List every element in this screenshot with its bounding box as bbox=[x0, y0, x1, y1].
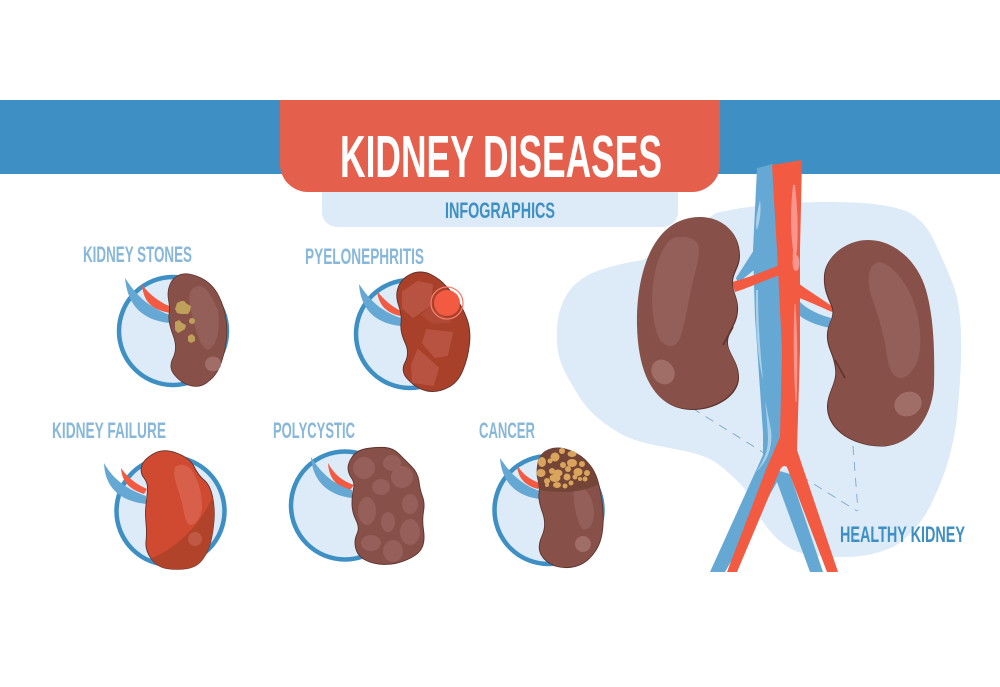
dashed leader lines bbox=[692, 408, 858, 511]
vessels bbox=[104, 463, 147, 504]
panel: kidney stones bbox=[83, 242, 227, 386]
right kidney bbox=[824, 240, 934, 446]
vessels bbox=[311, 457, 354, 498]
heading: PYELONEPHRITIS bbox=[305, 244, 424, 269]
kidney bbox=[168, 274, 227, 386]
background blob bbox=[557, 202, 961, 557]
circle bbox=[116, 457, 224, 565]
vessels bbox=[125, 278, 174, 323]
heading: CANCER bbox=[479, 418, 535, 443]
left kidney bbox=[637, 217, 740, 410]
subtitle: INFOGRAPHICS bbox=[445, 198, 555, 223]
circle bbox=[494, 456, 602, 564]
vein branch right bbox=[800, 302, 831, 328]
healthy kidney illustration bbox=[557, 160, 961, 572]
kidney bbox=[141, 451, 214, 569]
artery branch right bbox=[796, 283, 834, 312]
header band bbox=[0, 100, 1000, 174]
kidney bbox=[397, 272, 470, 392]
panel: pyelonephritis bbox=[305, 244, 470, 392]
vessels bbox=[359, 284, 403, 326]
circle bbox=[119, 277, 227, 385]
heading: KIDNEY STONES bbox=[83, 242, 192, 267]
kidney bbox=[537, 448, 603, 568]
heading: POLYCYSTIC bbox=[273, 418, 355, 443]
tumour bbox=[536, 448, 598, 492]
title banner bbox=[280, 100, 720, 192]
panel: polycystic bbox=[273, 418, 424, 564]
inflammation marker bbox=[431, 287, 463, 319]
subtitle panel bbox=[322, 170, 678, 227]
artery branch left bbox=[732, 265, 780, 292]
kidney stones bbox=[175, 301, 195, 343]
vessels bbox=[500, 458, 542, 499]
vein branch left bbox=[736, 250, 754, 283]
panel: kidney failure bbox=[52, 418, 224, 569]
heading: KIDNEY FAILURE bbox=[52, 418, 166, 443]
title: KIDNEY DISEASES bbox=[340, 124, 662, 190]
kidney bbox=[348, 447, 424, 564]
panel: cancer bbox=[479, 418, 603, 568]
circle bbox=[291, 452, 399, 560]
vein bbox=[710, 164, 831, 572]
artery bbox=[727, 160, 838, 572]
circle bbox=[356, 280, 464, 388]
